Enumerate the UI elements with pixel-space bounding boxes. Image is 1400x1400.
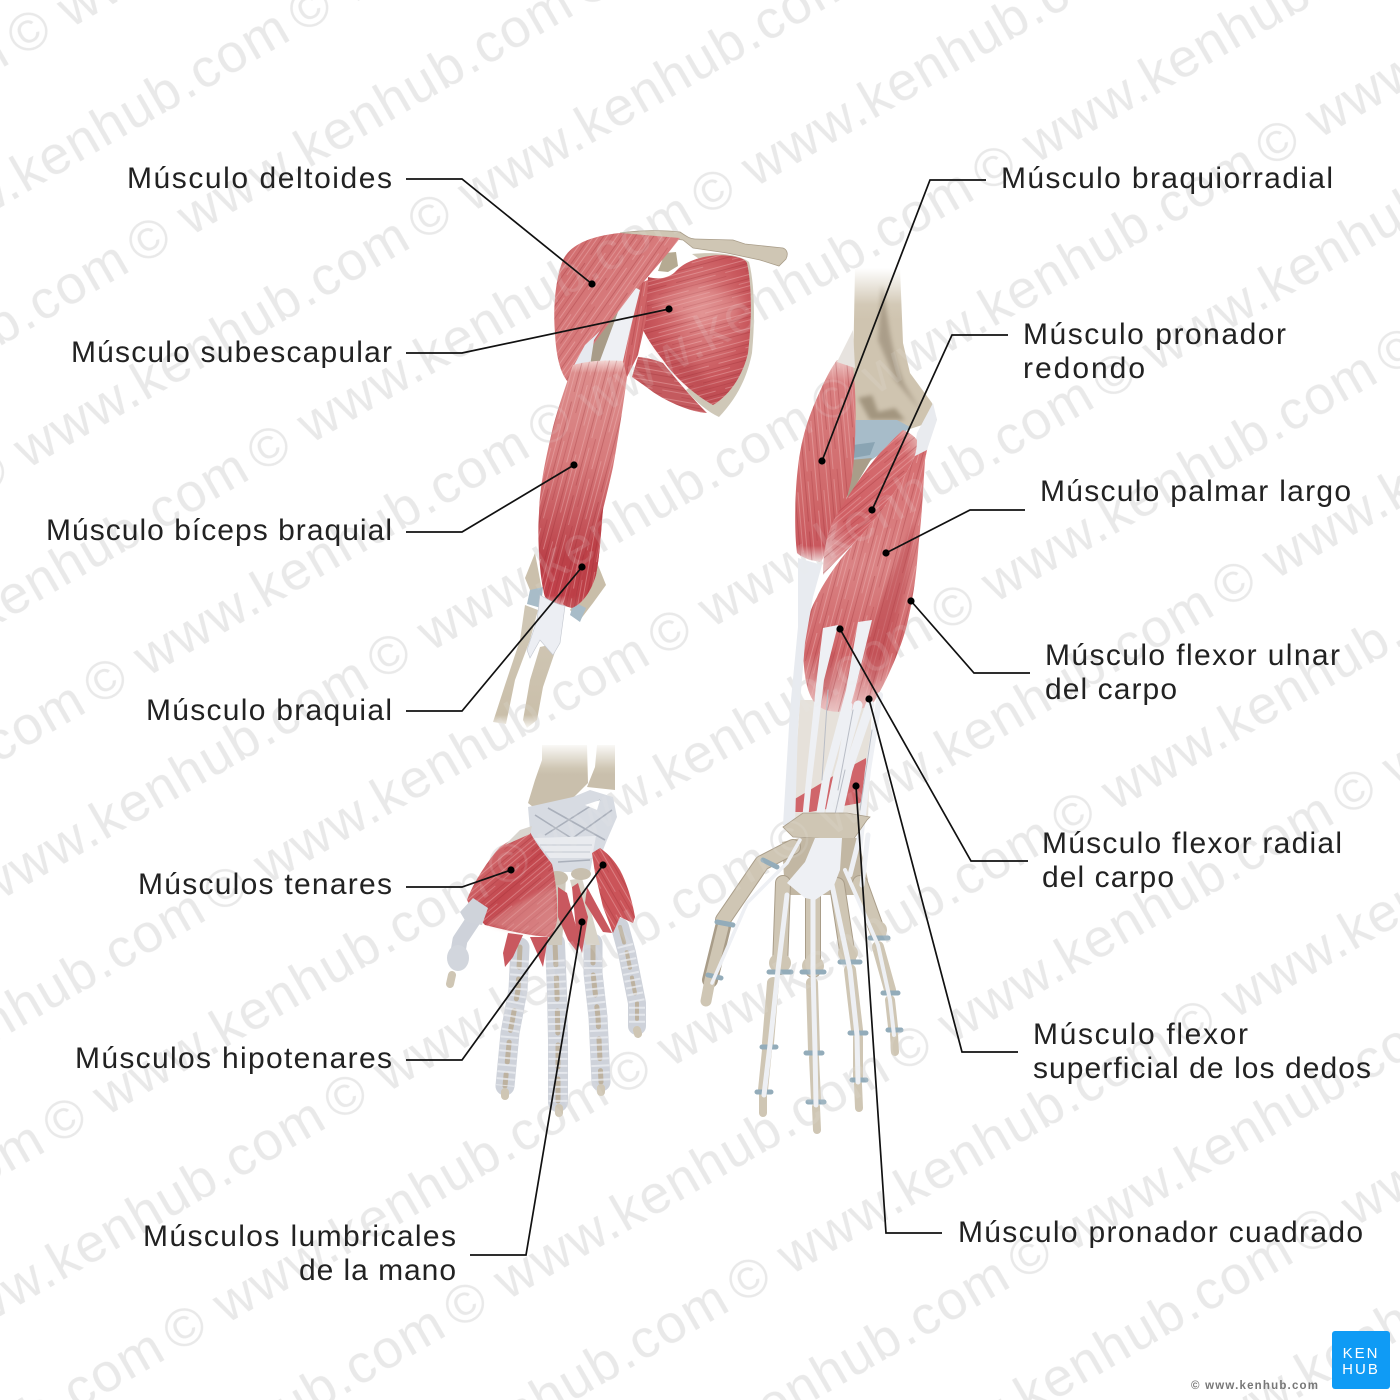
fingers: capsules and phalanges	[447, 868, 638, 1113]
label: Músculo flexor radial del carpo	[1042, 827, 1342, 894]
muscle: flexor mass, palmaris longus and flexor carpi ulnaris	[803, 420, 929, 712]
overlay: faint watermark over figures	[480, 220, 950, 1140]
label: Músculos tenares: Músculos tenares	[138, 868, 392, 901]
figure: forearm flexors	[706, 268, 937, 1130]
label: Músculo pronador redondo	[1023, 318, 1286, 385]
label: Músculo flexor radial del carpo: del carpo	[1042, 861, 1174, 894]
joints: cartilage	[708, 860, 901, 1102]
leader: lumbricales	[470, 918, 586, 1255]
label: Músculos lumbricales de la mano: Músculos lumbricales	[143, 1220, 456, 1253]
tendons of fingers	[712, 835, 894, 1105]
figure: shoulder and arm muscles	[493, 231, 787, 728]
label: Músculo flexor superficial de los dedos	[1033, 1018, 1371, 1085]
label: Músculo flexor ulnar del carpo: del carpo	[1045, 673, 1177, 706]
muscle: brachioradialis	[795, 330, 856, 562]
muscle: deltoid	[554, 233, 680, 384]
logo: Kenhub	[1332, 1331, 1390, 1389]
leader: pronador redondo	[868, 335, 1008, 514]
cartilage: elbow joint	[853, 420, 910, 463]
leader: deltoides	[406, 179, 596, 288]
ligament above thenar	[505, 826, 532, 845]
bone: humerus head behind tendons	[585, 285, 640, 368]
label: Músculos lumbricales de la mano: de la mano	[299, 1254, 456, 1287]
tendon: short head of biceps	[598, 288, 640, 366]
muscle: teres major	[632, 357, 707, 413]
fingers: skeleton	[706, 847, 901, 1130]
label: Músculo pronador cuadrado: Músculo pronador cuadrado	[958, 1216, 1363, 1249]
tendons of forearm	[783, 558, 880, 860]
leader: bíceps	[406, 461, 578, 532]
bone: radius	[528, 745, 588, 807]
leader: palmar largo	[882, 510, 1025, 557]
leader: pronador cuadrado	[852, 782, 942, 1233]
label: Músculos lumbricales de la mano	[143, 1220, 456, 1287]
thumb tendon and ligaments	[460, 898, 488, 925]
label: Músculo subescapular: Músculo subescapular	[71, 336, 392, 369]
label: Músculo pronador redondo: redondo	[1023, 352, 1145, 385]
muscle: hypothenar	[592, 848, 635, 933]
leader: flexor radial	[836, 625, 1028, 861]
bone: ulna	[587, 745, 615, 790]
bone: distal radius and carpals	[782, 813, 870, 895]
credit: © www.kenhub.com	[1191, 1380, 1318, 1392]
bone: humerus distal	[853, 268, 937, 430]
muscle: biceps lateral strip	[621, 280, 648, 377]
ligaments of the wrist	[528, 790, 617, 872]
leader: braquiorradial	[818, 180, 986, 465]
label: Músculo flexor ulnar del carpo: Músculo flexor ulnar	[1045, 639, 1340, 672]
figure: deep hand muscles	[447, 745, 638, 1113]
label: Músculo deltoides: Músculo deltoides	[127, 162, 392, 195]
tendon: common flexor origin	[913, 403, 937, 457]
bone: scapular border	[686, 253, 754, 417]
muscle: pronator quadratus	[793, 758, 868, 812]
bone: coracoid process	[658, 252, 678, 272]
muscle: brachialis	[563, 507, 603, 608]
muscle: biceps brachii	[538, 360, 627, 608]
label: Músculo braquial: Músculo braquial	[146, 694, 392, 727]
muscle: interossei and lumbricals	[503, 883, 612, 967]
muscle: thenar and adductor	[467, 832, 557, 937]
bone: elbow, radius and ulna	[493, 553, 606, 728]
label: Músculos hipotenares: Músculos hipotenares	[75, 1042, 392, 1075]
label: Músculo bíceps braquial: Músculo bíceps braquial	[46, 514, 392, 547]
label: Músculo flexor radial del carpo: Músculo flexor radial	[1042, 827, 1342, 860]
tendon: distal biceps	[527, 595, 565, 658]
tendon: long head of biceps	[572, 331, 600, 369]
tendon: brachioradialis origin	[837, 330, 855, 368]
label: Músculo braquiorradial: Músculo braquiorradial	[1001, 162, 1333, 195]
leader: flexor ulnar	[907, 597, 1030, 673]
leader: flexor superficial	[865, 695, 1018, 1052]
label: Músculo pronador redondo: Músculo pronador	[1023, 318, 1286, 351]
tendon backing: lower forearm	[792, 700, 872, 820]
bone: clavicle and acromion	[620, 231, 787, 266]
label: Músculo flexor superficial de los dedos: superficial de los dedos	[1033, 1052, 1371, 1085]
leader: tenares	[406, 866, 515, 887]
muscle: subscapularis	[643, 255, 751, 405]
logo: Kenhub: KEN	[1343, 1345, 1379, 1362]
leader: hipotenares	[406, 861, 607, 1060]
knuckles: bone ends	[769, 953, 791, 973]
leader: braquial	[406, 563, 586, 711]
logo: Kenhub: HUB	[1342, 1361, 1380, 1378]
muscle: pronator teres	[823, 430, 917, 575]
palmar aponeurosis	[787, 838, 842, 900]
bone: radial head	[847, 458, 872, 500]
label: Músculo palmar largo: Músculo palmar largo	[1040, 475, 1351, 508]
label: Músculo flexor superficial de los dedos: Músculo flexor	[1033, 1018, 1248, 1051]
leader: subescapular	[406, 305, 673, 353]
label: Músculo flexor ulnar del carpo	[1045, 639, 1340, 706]
